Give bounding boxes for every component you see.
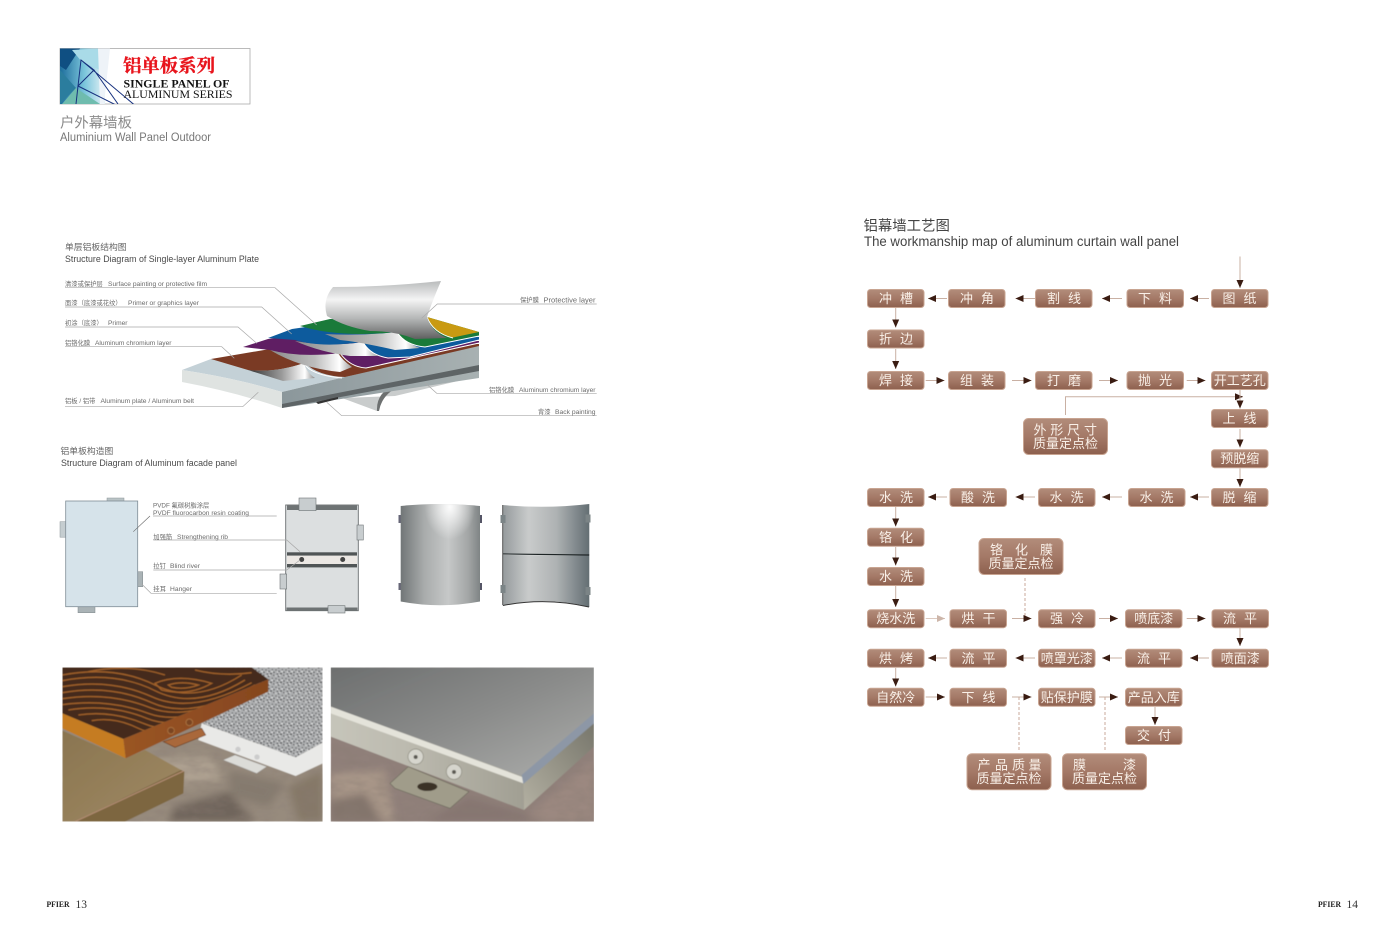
footer: page 14: PFIER [1318,900,1341,909]
step: 烘烤: 烘烤 [879,651,913,666]
callouts: panel parts [133,500,300,593]
step: 流平 [1126,649,1182,667]
step: 冲槽: 冲槽 [879,291,913,306]
callouts: panel parts: Blind river [170,563,200,570]
panel: front view [60,498,143,613]
heading: facade panel structure: Structure Diagram of Aluminum facade panel [61,458,237,468]
layer: brown chromium [211,340,479,377]
leader labels: left of plate diagram: Aluminum plate / Aluminum belt [100,398,194,405]
arrow [1016,496,1035,498]
step: 冲角: 冲角 [960,291,994,306]
step: 产品入库: 产品入库 [1128,690,1180,705]
checkpoint: 铬化膜 [979,538,1063,574]
arrow [1012,618,1032,620]
step: 铬化: 铬化 [879,530,913,545]
dashed link: 产品质量 [1018,697,1020,751]
arrow [1099,380,1118,382]
arrow [1190,298,1209,300]
step: 酸洗: 酸洗 [961,490,995,505]
step: 贴保护膜: 贴保护膜 [1041,690,1093,705]
step: 喷罩光漆: 喷罩光漆 [1041,651,1093,666]
step: 水洗: 水洗 [1140,490,1174,505]
heading: single-layer structure diagram: Structure Diagram of Single-layer Aluminum Plate [65,254,259,264]
step: 烘干 [950,610,1006,628]
step: 水洗 [1038,488,1095,506]
arrow [928,298,947,300]
arrow [1190,657,1209,659]
step: 割线: 割线 [1047,291,1081,306]
arrow [928,496,947,498]
step: 烘干: 烘干 [962,611,996,626]
arrow [926,618,945,620]
heading: workmanship map: The workmanship map of aluminum curtain wall panel [864,234,1179,249]
protective film curl [325,281,447,339]
step: 交付: 交付 [1137,728,1171,743]
step: 下料: 下料 [1138,291,1172,306]
arrow [926,696,945,698]
page heading [60,114,211,144]
panel faces [331,667,594,780]
step: 抛光: 抛光 [1138,373,1172,388]
page heading: Aluminium Wall Panel Outdoor [60,132,211,144]
footer: page 13: PFIER [46,900,70,909]
arrow [895,586,897,607]
gold layer [427,317,479,338]
bronze panel [62,731,181,822]
step: 开工艺孔: 开工艺孔 [1214,373,1266,388]
step: 打磨 [1036,372,1092,390]
leader labels: left of plate diagram: Primer [108,320,128,327]
callouts: panel parts: 拉钉 [153,561,167,570]
step: 下线 [950,688,1006,706]
leader labels: left of plate diagram: Aluminum chromium layer [95,340,172,347]
step: 自然冷: 自然冷 [876,690,915,705]
leader labels: right of plate diagram: 保护膜 [520,295,540,304]
flowchart: aluminum curtain wall process [868,256,1268,790]
callouts: panel parts: Strengthening rib [177,534,229,541]
screws [408,749,423,764]
arrow [895,547,897,566]
step: 水洗: 水洗 [879,569,913,584]
checkpoint: 膜漆: 质量定点检 [1072,771,1137,786]
step: 冲槽 [868,290,924,308]
arrow [1102,496,1122,498]
step: 脱缩 [1212,488,1268,506]
hanger bracket [390,767,469,808]
checkpoint: 外形尺寸: 外形尺寸 [1034,422,1097,438]
speckled stone panel [202,667,323,757]
arrow [895,308,897,328]
step: 喷底漆: 喷底漆 [1134,611,1173,626]
checkpoint: 膜漆: 膜漆 [1073,758,1136,772]
peel silver B [270,350,352,372]
step: 自然冷 [868,688,924,706]
heading: workmanship map [864,218,1179,249]
step: 水洗: 水洗 [879,490,913,505]
panel: back view [280,498,363,613]
footer: page 13: 13 [76,899,87,911]
slab right face [282,345,479,408]
step: 图纸 [1212,290,1268,308]
callouts: panel parts: PVDF 氟碳树脂涂层 [153,500,209,510]
slab left front face [182,370,282,408]
arrow [926,380,944,382]
step: 抛光 [1127,372,1184,390]
photo: silver metal panel with hanger [331,667,594,822]
step: 上线 [1212,410,1268,428]
step: 冲角 [948,290,1005,308]
step: 水洗 [868,568,924,586]
footer: page 14 [1318,899,1358,911]
leader labels: left of plate diagram: 面漆（底漆或花纹） [65,298,122,307]
step: 喷面漆: 喷面漆 [1221,651,1260,666]
step: 烘烤 [868,649,924,667]
heading: facade panel structure: 铝单板构造图 [60,445,113,456]
step: 流平: 流平 [962,651,996,666]
checkpoint: 铬化膜: 质量定点检 [988,556,1054,571]
dashed link: 铬化膜 [1024,578,1026,618]
arrow [928,657,947,659]
logo banner: ALUMINUM SERIES [124,88,232,101]
callouts: panel parts: Hanger [170,586,192,593]
logo banner: SINGLE PANEL OF [124,78,230,90]
step: 割线 [1036,290,1092,308]
step: 交付 [1126,726,1182,744]
arrow [895,668,897,686]
step: 烧水洗 [868,610,924,628]
arrow [1012,696,1032,698]
checkpoint: 产品质量: 质量定点检 [976,771,1042,786]
arrow [1239,429,1241,448]
heading: workmanship map: 铝幕墙工艺图 [864,218,950,234]
footer: page 14: 14 [1346,899,1358,911]
step: 流平 [1212,610,1268,628]
callouts: panel parts: 挂耳 [153,584,166,593]
dashed link: 膜漆 [1104,697,1106,751]
leader labels: left of plate diagram: 初涂（底漆） [65,318,103,327]
arrow [1102,298,1122,300]
slab top surface [182,345,479,392]
peel silver C [295,341,378,356]
arrow: start to 图纸 [1239,256,1241,288]
checkpoint: 铬化膜: 铬化膜 [990,542,1053,558]
step: 下线: 下线 [962,690,996,705]
leader labels: left of plate diagram: Surface painting or protective film [108,281,207,288]
heading: single-layer structure diagram: 单层铝板结构图 [65,241,127,252]
step: 预脱缩 [1212,450,1268,468]
step: 组装: 组装 [960,373,994,388]
step: 焊接: 焊接 [879,373,913,388]
checkpoint: 外形尺寸: 质量定点检 [1033,436,1098,451]
arrow [1102,657,1122,659]
leader labels: left of plate diagram: 铝铬化膜 [65,338,91,347]
step: 铬化 [868,528,924,546]
step: 上线: 上线 [1222,411,1257,426]
step: 打磨: 打磨 [1047,373,1081,388]
arrow [1190,496,1209,498]
arrow [1099,696,1118,698]
step: 脱缩: 脱缩 [1222,490,1257,505]
step: 喷面漆 [1212,649,1268,667]
peel silver A [248,363,315,381]
step: 下料 [1127,290,1184,308]
arrow [1099,618,1118,620]
checkpoint: 产品质量 [967,754,1051,790]
leader labels: right of plate diagram: Protective layer [544,296,596,304]
footer: page 13 [46,899,87,911]
panel: convex curved sample [398,504,482,605]
arrow: inspection link to line [1066,397,1243,415]
arrow [1016,657,1035,659]
leader labels: right of plate diagram: Aluminum chromium layer [519,387,596,394]
leader labels: right of plate diagram: Back painting [555,409,596,416]
leader labels: left of plate diagram: 铝板 / 铝带 [65,396,95,405]
step: 水洗: 水洗 [1050,490,1084,505]
icon: glass facade graphic [60,48,134,104]
wood panel [62,667,268,739]
peel silver D [325,332,420,350]
arrow [1239,628,1241,646]
step: 流平: 流平 [1223,611,1257,626]
step: 酸洗 [950,488,1006,506]
panel: concave curved sample [500,504,590,607]
step: 喷底漆 [1126,610,1182,628]
step: 图纸: 图纸 [1222,291,1257,306]
logo banner: 铝单板系列 [123,55,215,76]
heading: single-layer structure diagram [65,241,259,264]
layer: blue graphics [268,322,479,357]
step: 折边: 折边 [879,332,913,346]
leader labels: right of plate diagram: 背漆 [538,407,551,416]
photo: wood, stone and bronze finish panels [62,667,323,822]
step: 折边 [868,330,924,348]
step: 组装 [948,372,1005,390]
step: 水洗 [868,488,924,506]
leader labels: right of plate diagram: 铝铬化膜 [489,385,515,394]
heading: facade panel structure [60,445,237,468]
logo banner [60,48,250,104]
arrow [1154,707,1156,725]
step: 水洗 [1128,488,1185,506]
arrow [895,349,897,369]
step: 强冷: 强冷 [1050,611,1084,626]
callouts: panel parts: PVDF fluorocarbon resin coating [153,510,250,517]
leader labels: right of plate diagram [327,295,597,416]
checkpoint: 外形尺寸 [1024,418,1108,454]
diagram: layered aluminum plate [182,281,479,411]
arrow [895,507,897,526]
step: 流平 [950,649,1006,667]
leader labels: left of plate diagram [65,279,317,407]
step: 强冷 [1038,610,1095,628]
leader labels: left of plate diagram: Primer or graphics layer [128,300,199,307]
callouts: panel parts: 加强筋 [153,532,172,541]
leader labels: left of plate diagram: 清漆或保护层 [65,279,103,288]
step: 焊接 [868,372,924,390]
page heading: 户外幕墙板 [60,114,132,132]
arrow [1239,390,1241,408]
checkpoint: 膜漆 [1062,754,1146,790]
arrow [1016,298,1035,300]
arrow [1187,618,1206,620]
layer: purple primer [243,330,479,368]
step: 烧水洗: 烧水洗 [876,611,915,626]
layer: green surface [300,317,479,347]
arrow [1012,380,1032,382]
arrow [1187,380,1206,382]
step: 流平: 流平 [1137,651,1171,666]
step: 预脱缩: 预脱缩 [1220,451,1259,466]
arrow [1239,468,1241,487]
checkpoint: 产品质量: 产品质量 [978,758,1042,772]
